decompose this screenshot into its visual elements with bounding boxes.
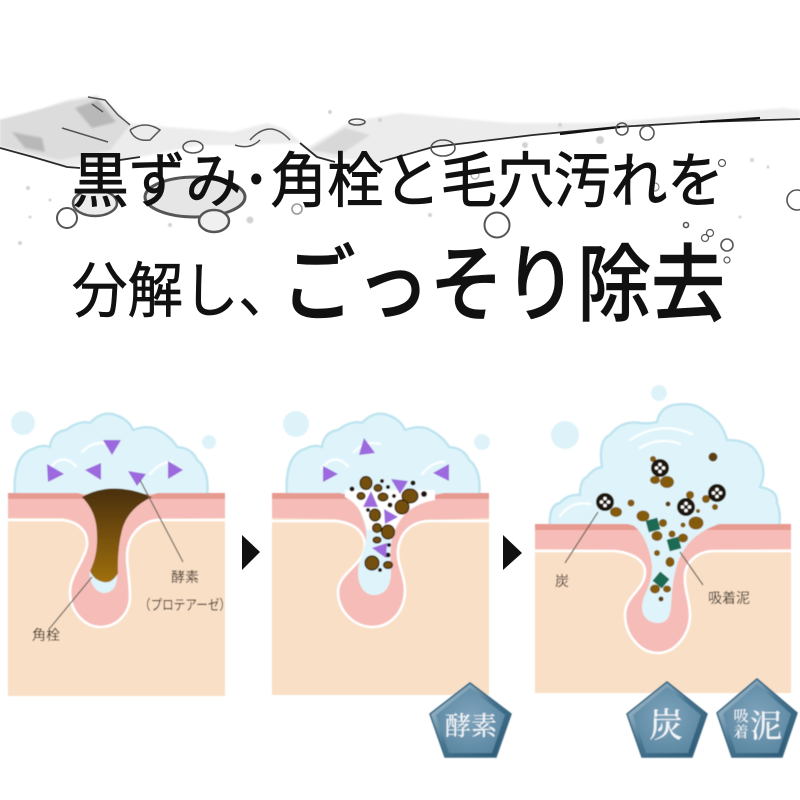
arrow: step 1 to 2 [242, 535, 260, 570]
badge: enzyme [430, 683, 511, 757]
label: keratin plug: 角栓 [32, 627, 60, 643]
title line 1: 黒ずみ･角栓と毛穴汚れを [72, 148, 724, 215]
label: charcoal: 炭 [555, 573, 569, 589]
broken-down plug particles [350, 476, 427, 572]
label: adsorbent mud: 吸着泥 [708, 590, 750, 606]
badge: enzyme: 酵素 [445, 712, 497, 741]
panel: keratin plug before treatment [8, 411, 231, 696]
badge: adsorbent mud: 泥 [750, 708, 782, 744]
badge: charcoal [627, 682, 707, 757]
leader lines [565, 512, 703, 585]
foam bubbles [283, 411, 490, 498]
skin layers [8, 493, 225, 696]
dirt particles [610, 452, 718, 602]
enzyme triangles [47, 440, 183, 486]
badge: charcoal: 炭 [649, 707, 683, 745]
badge: adsorbent mud: 着 [733, 724, 749, 741]
title line 2 [72, 238, 725, 332]
label: enzyme: 酵素 [171, 569, 199, 585]
charcoal particles [596, 459, 726, 516]
keratin plug [82, 488, 152, 582]
arrow: step 2 to 3 [503, 535, 522, 570]
foam bubbles [550, 385, 780, 530]
skin layers [272, 490, 489, 695]
skin layers [535, 524, 791, 693]
title: emphasized removal: ごっそり除去 [282, 238, 725, 332]
enzyme triangles [323, 438, 449, 558]
leader lines [50, 480, 183, 628]
water splash band [0, 95, 800, 263]
badge: adsorbent mud: 吸 [733, 708, 749, 725]
panel: enzyme breaking down plug [272, 411, 490, 695]
badge: adsorbent mud [717, 679, 797, 757]
title: decompose: 分解し、 [72, 258, 294, 325]
panel: charcoal and mud adsorb dirt [535, 385, 791, 693]
label: protease: （プロテアーゼ） [139, 597, 231, 613]
foam bubbles [11, 411, 216, 498]
adsorbent mud squares [646, 518, 681, 588]
